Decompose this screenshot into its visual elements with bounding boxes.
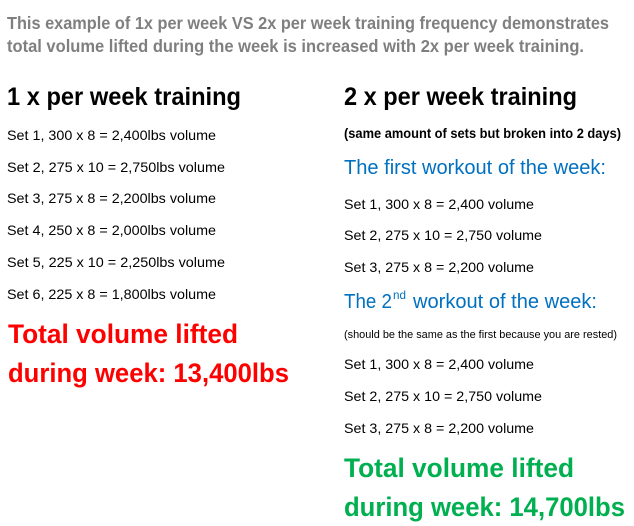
intro text [7,13,609,56]
set list: 1x per week: Set 5, 225 x 10 = 2,250lbs volume [7,254,225,270]
heading: 1x per week: 1 x per week training [7,83,241,111]
set list: first workout: Set 1, 300 x 8 = 2,400 volume [344,196,534,212]
panel: 2x per week training [344,83,625,522]
set list: 1x per week: Set 3, 275 x 8 = 2,200lbs volume [7,190,216,206]
intro text: This example of 1x per week VS 2x per week training frequency demonstrates [7,13,609,33]
heading: second workout [344,288,597,313]
set list: second workout: Set 2, 275 x 10 = 2,750 volume [344,388,542,404]
panel: 1x per week training [7,83,289,388]
heading: first workout: The first workout of the week: [344,157,606,179]
set list: second workout: Set 3, 275 x 8 = 2,200 volume [344,420,534,436]
total: 13,400lbs: Total volume lifted [8,319,238,349]
set list: 1x per week [7,127,225,302]
heading: second workout: nd [393,288,406,302]
set list: first workout [344,196,542,275]
set list: 1x per week: Set 1, 300 x 8 = 2,400lbs volume [7,127,216,143]
set list: 1x per week: Set 2, 275 x 10 = 2,750lbs volume [7,159,225,175]
set list: second workout: Set 1, 300 x 8 = 2,400 volume [344,356,534,372]
intro text: total volume lifted during the week is increased with 2x per week training. [7,36,584,56]
heading: second workout: The 2 [344,291,392,313]
total: 13,400lbs [8,319,289,388]
set list: first workout: Set 2, 275 x 10 = 2,750 volume [344,227,542,243]
total: 14,700lbs: during week: 14,700lbs [344,492,625,522]
set list: 1x per week: Set 4, 250 x 8 = 2,000lbs volume [7,222,216,238]
set list: second workout [344,356,542,436]
total: 13,400lbs: during week: 13,400lbs [8,358,289,388]
heading: 2x per week: 2 x per week training [344,83,577,111]
total: 14,700lbs: Total volume lifted [344,453,574,483]
total: 14,700lbs [344,453,625,522]
set list: first workout: Set 3, 275 x 8 = 2,200 volume [344,259,534,275]
set list: 1x per week: Set 6, 225 x 8 = 1,800lbs volume [7,286,216,302]
note: rested: (should be the same as the first because you are rested) [344,329,617,341]
heading: second workout: workout of the week: [412,291,597,313]
